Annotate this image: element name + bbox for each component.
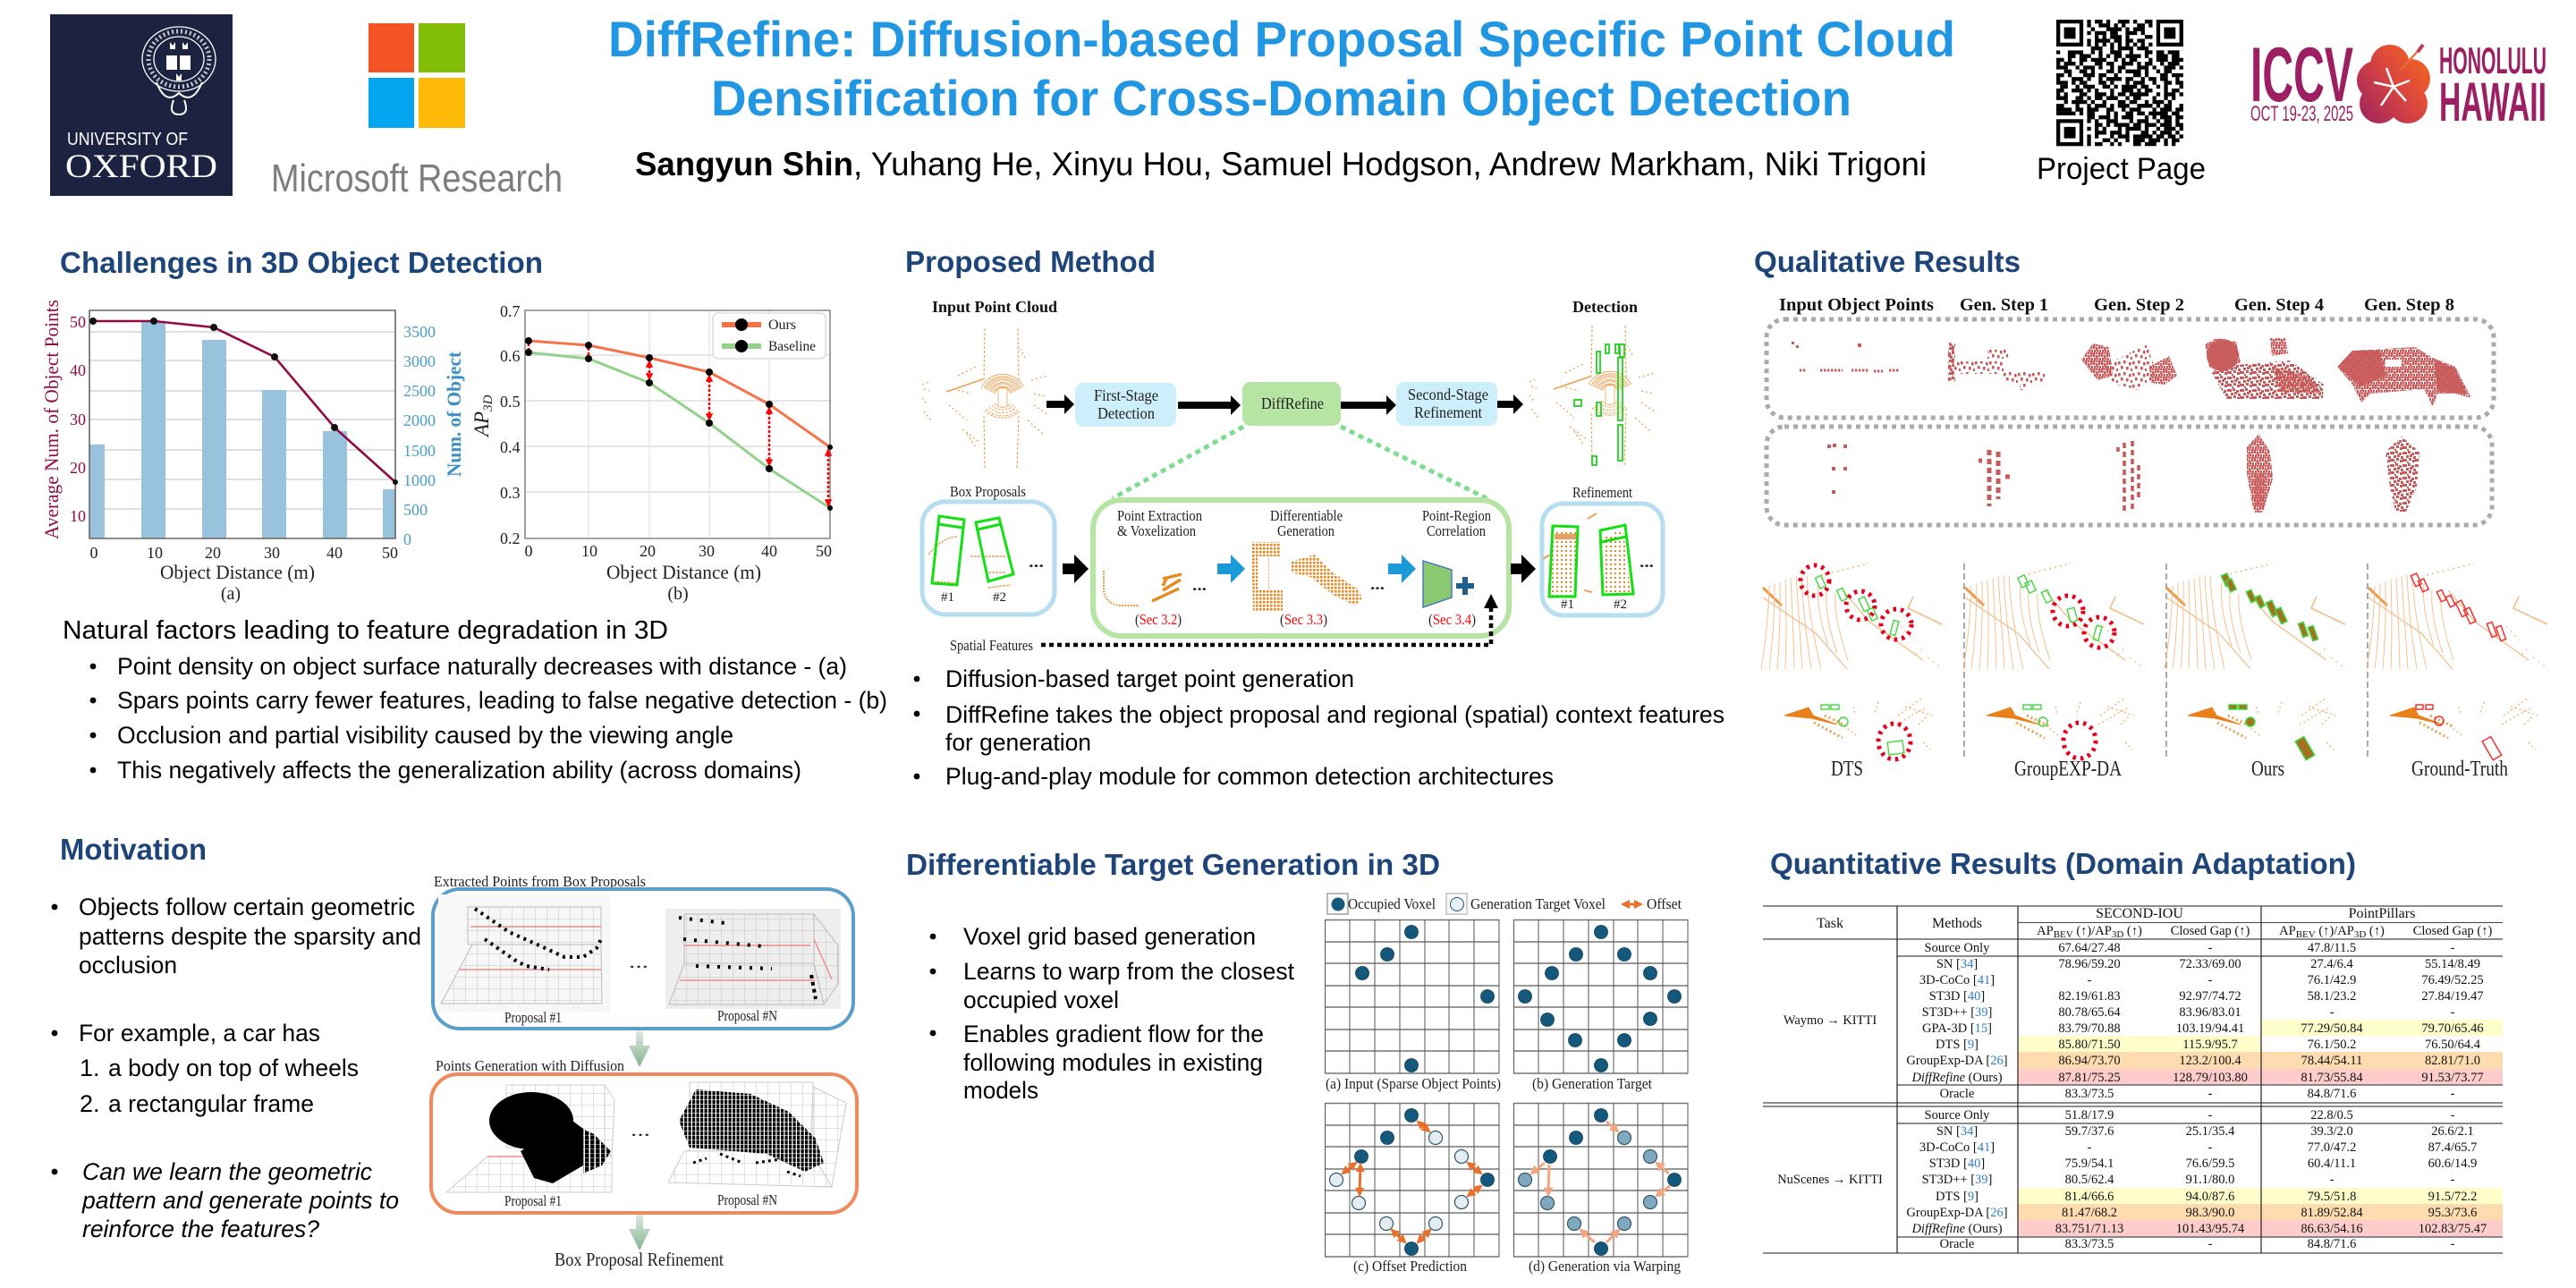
table: domain adaptation results: - <box>2088 973 2092 987</box>
chart (a): object points and count by distance: 10 <box>70 507 86 525</box>
voxel grid (d): generation via warping <box>1513 1103 1688 1275</box>
chart (b): AP3D by distance: AP <box>470 411 493 436</box>
scene comparison: Ground-Truth <box>2367 564 2548 760</box>
table: domain adaptation results: - <box>2451 1173 2455 1187</box>
chart (a): object points and count by distance: 50 <box>382 544 398 562</box>
table: domain adaptation results: BEV <box>2054 929 2073 940</box>
legend: voxel types: Offset <box>1647 895 1682 912</box>
text block: natural factors: Point density on object surface naturally decreases with distance - (a) <box>117 653 847 680</box>
panel: qualitative results <box>1754 245 2548 781</box>
table: domain adaptation results: 115.9/95.7 <box>2182 1038 2238 1052</box>
table: domain adaptation results: 83.96/83.01 <box>2179 1005 2241 1020</box>
table: domain adaptation results: Source Only <box>1925 941 1990 955</box>
heading: motivation: Motivation <box>60 833 207 866</box>
text block: natural factors: Occlusion and partial visibility caused by the viewing angle <box>117 722 733 749</box>
chart (b): AP3D by distance: 0.2 <box>500 530 521 547</box>
table: domain adaptation results: - <box>2088 1140 2092 1155</box>
text block: motivation bullets: patterns despite the sparsity and <box>79 923 421 950</box>
table: domain adaptation results: 82.81/71.0 <box>2425 1054 2480 1068</box>
chart (a): object points and count by distance: 3500 <box>403 323 436 341</box>
table: domain adaptation results: 59.7/37.6 <box>2065 1124 2114 1139</box>
heading: qualitative results: Qualitative Results <box>1754 245 2021 278</box>
table: domain adaptation results: 81.73/55.84 <box>2301 1071 2363 1085</box>
figure: points generation with diffusion: ... <box>631 1121 650 1140</box>
text block: method bullets: Diffusion-based target point generation <box>945 665 1354 692</box>
panel: DiffRefine module: Point-Region <box>1422 507 1491 524</box>
diagram: pipeline top row <box>922 298 1655 498</box>
chart (b): AP3D by distance: 0 <box>524 542 533 560</box>
box: refinement: Refinement <box>1572 484 1632 501</box>
table: domain adaptation results: 3D <box>2354 929 2366 940</box>
table: domain adaptation results: 67.64/27.48 <box>2058 941 2121 955</box>
chart (b): AP3D by distance: 40 <box>761 542 777 560</box>
text block: motivation bullets: reinforce the features? <box>82 1216 319 1242</box>
table: domain adaptation results: 76.1/50.2 <box>2308 1038 2356 1052</box>
table: domain adaptation results: 3D-CoCo [41] <box>1919 1140 1995 1155</box>
table: domain adaptation results: ST3D [40] <box>1929 1157 1985 1171</box>
text block: natural factors <box>63 616 887 784</box>
panel: DiffRefine module: (Sec 3.3) <box>1280 611 1327 628</box>
table: domain adaptation results: 58.1/23.2 <box>2308 989 2356 1004</box>
panel: DiffRefine module: (Sec 3.2) <box>1135 611 1182 628</box>
figure: points generation with diffusion: Points Generation with Diffusion <box>436 1057 624 1074</box>
diagram: pipeline top row: Detection <box>1572 298 1638 316</box>
box: refinement <box>1542 484 1663 615</box>
figure: extracted points from box proposals <box>433 873 853 1029</box>
text block: generation bullets: following modules in existing <box>963 1049 1263 1076</box>
table: domain adaptation results: 81.47/68.2 <box>2062 1206 2117 1220</box>
table: domain adaptation results: 83.79/70.88 <box>2058 1021 2121 1036</box>
column labels: Gen. Step 8 <box>2364 295 2454 315</box>
scene labels: GroupEXP-DA <box>2014 758 2123 781</box>
table: domain adaptation results: 80.5/62.4 <box>2065 1173 2114 1187</box>
chart (a): object points and count by distance <box>40 300 465 604</box>
chart (b): AP3D by distance: 10 <box>581 542 597 560</box>
title: Densification for Cross-Domain Object Detection <box>711 70 1852 126</box>
table: domain adaptation results: 87.4/65.7 <box>2428 1140 2477 1155</box>
table: domain adaptation results: - <box>2208 1108 2213 1123</box>
figure: points generation with diffusion: Proposal #1 <box>504 1192 562 1209</box>
table: domain adaptation results: SECOND-IOU <box>2096 906 2183 921</box>
table: domain adaptation results: ST3D++ [39] <box>1922 1173 1992 1187</box>
panel: DiffRefine module: Point Extraction <box>1117 507 1202 524</box>
table: domain adaptation results: (↑) <box>2123 924 2142 938</box>
panel: quantitative results <box>1763 847 2503 1253</box>
table: domain adaptation results: ST3D++ [39] <box>1922 1005 1992 1020</box>
scene labels: DTS <box>1831 758 1863 781</box>
table: domain adaptation results: Source Only <box>1925 1108 1990 1123</box>
figure: points generation with diffusion <box>431 1057 857 1213</box>
figure: extracted points from box proposals: ... <box>629 953 648 972</box>
chart (a): object points and count by distance: 40 <box>70 361 86 379</box>
chart (b): AP3D by distance: 30 <box>699 542 715 560</box>
table: domain adaptation results: - <box>2451 941 2455 955</box>
table: domain adaptation results: 128.79/103.80 <box>2173 1071 2248 1085</box>
box: refinement: #1 <box>1561 597 1574 612</box>
chart (a): object points and count by distance: Average Num. of Object Points <box>40 300 63 539</box>
scene comparison: Ours <box>2165 564 2346 760</box>
table: domain adaptation results: AP <box>2279 924 2296 938</box>
table: domain adaptation results: (↑)/AP <box>2316 924 2354 938</box>
table: domain adaptation results: 94.0/87.6 <box>2186 1190 2234 1204</box>
table: domain adaptation results: Waymo → KITTI <box>1784 1013 1877 1028</box>
table: domain adaptation results: 103.19/94.41 <box>2176 1021 2244 1036</box>
diagram: pipeline top row: Refinement <box>1414 403 1482 421</box>
table: domain adaptation results: - <box>2208 1140 2213 1155</box>
heading: proposed method: Proposed Method <box>905 245 1156 278</box>
table: domain adaptation results: GroupExp-DA [26] <box>1906 1206 2008 1220</box>
chart (a): object points and count by distance: 20 <box>70 459 86 477</box>
table: domain adaptation results: Closed Gap (↑) <box>2171 924 2250 938</box>
voxel grid (b): generation target: (b) Generation Target <box>1532 1075 1652 1092</box>
chart (a): object points and count by distance: 10 <box>147 544 163 562</box>
legend: voxel types <box>1327 894 1682 914</box>
logo: University of Oxford: UNIVERSITY OF <box>67 130 188 149</box>
table: domain adaptation results: ST3D [40] <box>1929 989 1985 1004</box>
panel: DiffRefine module <box>1093 500 1509 636</box>
chart (b): AP3D by distance <box>470 302 833 604</box>
table: domain adaptation results: - <box>2208 973 2213 987</box>
panel: DiffRefine module: (Sec 3.4) <box>1428 611 1476 628</box>
table: domain adaptation results: 78.44/54.11 <box>2301 1054 2362 1068</box>
logo: ICCV Honolulu Hawaii: OCT 19-23, 2025 <box>2250 102 2353 126</box>
title <box>608 11 1955 126</box>
table: domain adaptation results: 81.89/52.84 <box>2301 1206 2363 1220</box>
logo: ICCV Honolulu Hawaii: ICCV <box>2250 32 2353 118</box>
box: proposals <box>922 483 1055 614</box>
table: domain adaptation results: 27.84/19.47 <box>2421 989 2484 1004</box>
title: DiffRefine: Diffusion-based Proposal Specific Point Cloud <box>608 11 1955 67</box>
table: domain adaptation results: - <box>2330 1173 2334 1187</box>
table: domain adaptation results: SN [34] <box>1936 957 1978 971</box>
figure: extracted points from box proposals: Proposal #1 <box>504 1009 562 1026</box>
chart (b): AP3D by distance: 3D <box>481 394 496 412</box>
panel: DiffRefine module: ... <box>1370 576 1385 593</box>
chart (b): AP3D by distance: 20 <box>640 542 656 560</box>
table: domain adaptation results: - <box>2451 1237 2455 1251</box>
QR caption: Project Page <box>2037 152 2206 186</box>
table: domain adaptation results: 27.4/6.4 <box>2310 957 2354 971</box>
voxel grid (c): offset prediction: (c) Offset Prediction <box>1353 1258 1467 1275</box>
chart (a): object points and count by distance: Object Distance (m) <box>160 561 315 583</box>
voxel grid (a): input: (a) Input (Sparse Object Points) <box>1326 1075 1501 1092</box>
text block: generation bullets: Enables gradient flow for the <box>963 1021 1264 1047</box>
divider <box>1963 564 1965 758</box>
text block: motivation bullets: For example, a car has <box>79 1020 320 1046</box>
text block: generation bullets: Voxel grid based generation <box>963 923 1256 950</box>
table: domain adaptation results: Task <box>1817 916 1843 931</box>
table: domain adaptation results: 83.751/71.13 <box>2055 1222 2123 1236</box>
figure: extracted points from box proposals: Proposal #N <box>717 1007 777 1024</box>
box: refinement: #2 <box>1614 597 1627 612</box>
panel: DiffRefine module: & Voxelization <box>1117 522 1196 539</box>
divider <box>2367 564 2368 758</box>
voxel grid (c): offset prediction <box>1325 1103 1499 1275</box>
chart (a): object points and count by distance: 0 <box>89 544 98 562</box>
table: domain adaptation results: 26.6/2.1 <box>2431 1124 2474 1139</box>
logo: University of Oxford: OXFORD <box>65 148 217 185</box>
table: domain adaptation results: AP <box>2037 924 2054 938</box>
logo: Microsoft Research: Microsoft Research <box>271 157 563 200</box>
box: refinement: ... <box>1640 554 1654 571</box>
diagram: pipeline top row: Input Point Cloud <box>932 298 1057 316</box>
table: domain adaptation results: DiffRefine (Ours) <box>1911 1222 2003 1236</box>
text block: motivation bullets: a rectangular frame <box>108 1090 314 1117</box>
table: domain adaptation results: 76.49/52.25 <box>2421 973 2484 987</box>
chart (a): object points and count by distance: 30 <box>264 544 280 562</box>
panel: DiffRefine module: ... <box>1192 577 1207 594</box>
table: domain adaptation results: 123.2/100.4 <box>2179 1054 2241 1068</box>
table: domain adaptation results: 80.78/65.64 <box>2058 1005 2121 1020</box>
chart (a): object points and count by distance: 0 <box>403 530 411 548</box>
table: domain adaptation results: 101.43/95.74 <box>2176 1222 2245 1236</box>
text block: method bullets: DiffRefine takes the object proposal and regional (spatial) context features <box>945 701 1724 728</box>
table: domain adaptation results: 83.3/73.5 <box>2065 1087 2114 1101</box>
table: domain adaptation results: PointPillars <box>2349 906 2415 921</box>
table: domain adaptation results: 81.4/66.6 <box>2065 1190 2114 1204</box>
arrow: to refinement <box>1511 555 1536 583</box>
table: domain adaptation results: 98.3/90.0 <box>2186 1206 2234 1220</box>
diagram: pipeline top row: DiffRefine <box>1261 394 1324 412</box>
scene comparison: GroupEXP-DA <box>1963 564 2145 758</box>
table: domain adaptation results: 91.5/72.2 <box>2428 1190 2477 1204</box>
figure: extracted points from box proposals: Extracted Points from Box Proposals <box>434 873 646 890</box>
table: domain adaptation results: 3D <box>2112 929 2123 940</box>
table: domain adaptation results: 86.94/73.70 <box>2058 1054 2121 1068</box>
chart (b): AP3D by distance: Baseline <box>768 339 816 354</box>
panel: motivation <box>52 833 857 1270</box>
table: domain adaptation results: 78.96/59.20 <box>2058 957 2121 971</box>
column labels: Gen. Step 4 <box>2234 295 2324 315</box>
chart (b): AP3D by distance: 0.6 <box>500 347 521 365</box>
table: domain adaptation results: DiffRefine (Ours) <box>1911 1071 2003 1085</box>
table: domain adaptation results: Oracle <box>1940 1237 1974 1251</box>
table: domain adaptation results: 39.3/2.0 <box>2310 1124 2353 1139</box>
table: domain adaptation results: - <box>2208 1237 2213 1251</box>
text block: natural factors: This negatively affects the generalization ability (across domains) <box>117 757 801 784</box>
dotted box: row 2 generated car points <box>1767 427 2492 525</box>
table: domain adaptation results <box>1763 906 2503 1253</box>
table: domain adaptation results: 25.1/35.4 <box>2186 1124 2235 1139</box>
panel: challenges in 3D object detection <box>40 246 887 784</box>
table: domain adaptation results: (↑)/AP <box>2073 924 2112 938</box>
arrow: to DiffRefine module <box>1063 555 1089 583</box>
column labels <box>1779 295 2454 315</box>
table: domain adaptation results: 92.97/74.72 <box>2179 989 2241 1004</box>
table: domain adaptation results: 95.3/73.6 <box>2428 1206 2477 1220</box>
table: domain adaptation results: 84.8/71.6 <box>2308 1087 2356 1101</box>
logo: Microsoft Research <box>271 23 563 200</box>
QR code <box>2056 20 2183 146</box>
text block: motivation bullets: occlusion <box>79 952 177 979</box>
arrow: spatial features feed: Spatial Features <box>950 637 1033 654</box>
table: domain adaptation results: 75.9/54.1 <box>2065 1157 2114 1171</box>
table: domain adaptation results: 91.1/80.0 <box>2186 1173 2234 1187</box>
box: proposals: #1 <box>941 590 954 605</box>
scene labels <box>1831 758 2508 781</box>
text block: motivation bullets: 1. <box>80 1055 100 1081</box>
table: domain adaptation results: - <box>2330 1005 2334 1020</box>
table: domain adaptation results: 84.8/71.6 <box>2308 1237 2356 1251</box>
table: domain adaptation results: GroupExp-DA [26] <box>1906 1054 2008 1068</box>
text block: generation bullets <box>930 923 1294 1104</box>
diagram: pipeline top row: Detection <box>1097 404 1155 422</box>
text block: natural factors: Natural factors leading to feature degradation in 3D <box>63 616 668 645</box>
chart (b): AP3D by distance: 0.4 <box>500 438 521 456</box>
logo: ICCV Honolulu Hawaii <box>2250 32 2546 132</box>
chart (a): object points and count by distance: (a) <box>221 584 241 604</box>
table: domain adaptation results: 102.83/75.47 <box>2419 1222 2487 1236</box>
dotted box: row 1 generated car points <box>1767 319 2494 418</box>
text block: motivation bullets: a body on top of wheels <box>108 1055 359 1081</box>
table: domain adaptation results: - <box>2208 1087 2213 1101</box>
diagram: pipeline top row: Second-Stage <box>1408 386 1488 403</box>
diagram: pipeline top row: First-Stage <box>1094 386 1158 404</box>
table: domain adaptation results: 79.70/65.46 <box>2421 1021 2484 1036</box>
table: domain adaptation results: Oracle <box>1940 1087 1974 1101</box>
panel: differentiable target generation <box>906 848 1688 1275</box>
table: domain adaptation results: 91.53/73.77 <box>2421 1071 2484 1085</box>
scene comparison: DTS <box>1761 564 1943 759</box>
panel: DiffRefine module: Differentiable <box>1270 507 1343 524</box>
table: domain adaptation results: BEV <box>2296 929 2316 940</box>
table: domain adaptation results: 47.8/11.5 <box>2308 941 2356 955</box>
table: domain adaptation results: 60.6/14.9 <box>2428 1157 2477 1171</box>
figure: points generation with diffusion: Proposal #N <box>717 1191 777 1208</box>
table: domain adaptation results: 60.4/11.1 <box>2308 1157 2356 1171</box>
authors: Sangyun Shin <box>635 146 853 182</box>
chart (a): object points and count by distance: 2500 <box>403 382 436 400</box>
chart (a): object points and count by distance: 40 <box>326 544 343 562</box>
text block: motivation bullets: 2. <box>80 1090 100 1117</box>
table: domain adaptation results: Methods <box>1932 916 1982 931</box>
voxel grid (b): generation target <box>1513 919 1688 1092</box>
text block: generation bullets: models <box>963 1077 1038 1104</box>
text block: generation bullets: Learns to warp from the closest <box>963 958 1294 985</box>
heading: differentiable target generation: Differentiable Target Generation in 3D <box>906 848 1440 881</box>
table: domain adaptation results: DTS [9] <box>1936 1038 1979 1052</box>
table: domain adaptation results: NuScenes → KITTI <box>1777 1173 1883 1187</box>
voxel grid (d): generation via warping: (d) Generation via Warping <box>1529 1258 1681 1275</box>
voxel grid (a): input <box>1325 919 1501 1092</box>
chart (b): AP3D by distance: 50 <box>816 542 832 560</box>
chart (a): object points and count by distance: 20 <box>205 544 221 562</box>
chart (b): AP3D by distance: 0.7 <box>500 302 521 320</box>
text block: motivation bullets: Objects follow certain geometric <box>79 894 415 920</box>
chart (b): AP3D by distance: Object Distance (m) <box>606 561 761 583</box>
legend: voxel types: Generation Target Voxel <box>1470 895 1606 912</box>
table: domain adaptation results: - <box>2451 1087 2455 1101</box>
chart (b): AP3D by distance: 0.3 <box>500 484 521 502</box>
table: domain adaptation results: DTS [9] <box>1936 1190 1979 1204</box>
box: proposals: #2 <box>993 590 1006 605</box>
table: domain adaptation results: 87.81/75.25 <box>2058 1071 2121 1085</box>
chart (b): AP3D by distance: Ours <box>768 318 796 333</box>
text block: motivation bullets: Can we learn the geometric <box>82 1158 372 1185</box>
legend: voxel types: Occupied Voxel <box>1348 895 1436 912</box>
table: domain adaptation results: 76.1/42.9 <box>2308 973 2356 987</box>
text block: method bullets <box>914 665 1724 790</box>
box: proposals: ... <box>1029 554 1044 571</box>
text block: method bullets: for generation <box>945 729 1091 756</box>
table: domain adaptation results: 76.50/64.4 <box>2425 1038 2481 1052</box>
chart (a): object points and count by distance: 3000 <box>403 352 436 370</box>
panel: proposed method <box>905 245 1724 790</box>
heading: challenges: Challenges in 3D Object Detection <box>60 246 543 279</box>
table: domain adaptation results: 86.63/54.16 <box>2301 1222 2363 1236</box>
box: proposals: Box Proposals <box>950 483 1026 500</box>
chart (b): AP3D by distance: (b) <box>667 584 689 604</box>
table: domain adaptation results: 82.19/61.83 <box>2058 989 2121 1004</box>
table: domain adaptation results: Closed Gap (↑) <box>2413 924 2492 938</box>
panel: DiffRefine module: Generation <box>1277 522 1335 539</box>
scene labels: Ground-Truth <box>2411 758 2508 781</box>
text block: motivation bullets: pattern and generate points to <box>81 1187 399 1214</box>
column labels: Gen. Step 2 <box>2094 295 2184 315</box>
arrow: down to generation <box>629 1031 650 1067</box>
text block: generation bullets: occupied voxel <box>963 987 1119 1013</box>
table: domain adaptation results: GPA-3D [15] <box>1922 1021 1992 1036</box>
logo: University of Oxford <box>50 14 233 196</box>
table: domain adaptation results: 22.8/0.5 <box>2310 1108 2353 1123</box>
chart (b): AP3D by distance: 0.5 <box>500 393 521 411</box>
table: domain adaptation results: 83.3/73.5 <box>2065 1237 2114 1251</box>
arrow: down to refinement <box>629 1215 650 1250</box>
heading: quantitative results: Quantitative Results (Domain Adaptation) <box>1770 847 2356 880</box>
table: domain adaptation results: (↑) <box>2366 924 2385 938</box>
table: domain adaptation results: 76.6/59.5 <box>2186 1157 2234 1171</box>
table: domain adaptation results: SN [34] <box>1936 1124 1978 1139</box>
table: domain adaptation results: - <box>2208 941 2213 955</box>
text block: method bullets: Plug-and-play module for common detection architectures <box>945 763 1554 790</box>
table: domain adaptation results: 85.80/71.50 <box>2058 1038 2121 1052</box>
scene labels: Ours <box>2251 758 2284 781</box>
table: domain adaptation results: 51.8/17.9 <box>2065 1108 2114 1123</box>
text block: motivation bullets <box>52 894 421 1242</box>
column labels: Gen. Step 1 <box>1960 295 2048 315</box>
table: domain adaptation results: 77.29/50.84 <box>2301 1021 2363 1036</box>
chart (a): object points and count by distance: 500 <box>403 501 428 519</box>
table: domain adaptation results: 72.33/69.00 <box>2179 957 2241 971</box>
chart (a): object points and count by distance: 2000 <box>403 411 436 429</box>
table: domain adaptation results: - <box>2451 1108 2455 1123</box>
text block: natural factors: Spars points carry fewer features, leading to false negative detection - (b) <box>117 687 887 714</box>
table: domain adaptation results: 79.5/51.8 <box>2308 1190 2356 1204</box>
table: domain adaptation results: 3D-CoCo [41] <box>1919 973 1995 987</box>
table: domain adaptation results: 55.14/8.49 <box>2425 957 2480 971</box>
column labels: Input Object Points <box>1779 295 1934 315</box>
chart (a): object points and count by distance: Num. of Object <box>443 351 465 477</box>
caption: box proposal refinement: Box Proposal Refinement <box>555 1249 724 1270</box>
authors: , Yuhang He, Xinyu Hou, Samuel Hodgson, Andrew Markham, Niki Trigoni <box>853 146 1927 182</box>
panel: DiffRefine module: Correlation <box>1427 522 1486 539</box>
arrow: spatial features feed <box>950 594 1498 654</box>
table: domain adaptation results: - <box>2451 1005 2455 1020</box>
divider <box>2165 564 2167 758</box>
chart (a): object points and count by distance: 30 <box>70 411 86 428</box>
chart (a): object points and count by distance: 1000 <box>403 471 436 489</box>
chart (a): object points and count by distance: 50 <box>70 313 86 331</box>
table: domain adaptation results: 77.0/47.2 <box>2308 1140 2356 1155</box>
chart (a): object points and count by distance: 1500 <box>403 442 436 460</box>
